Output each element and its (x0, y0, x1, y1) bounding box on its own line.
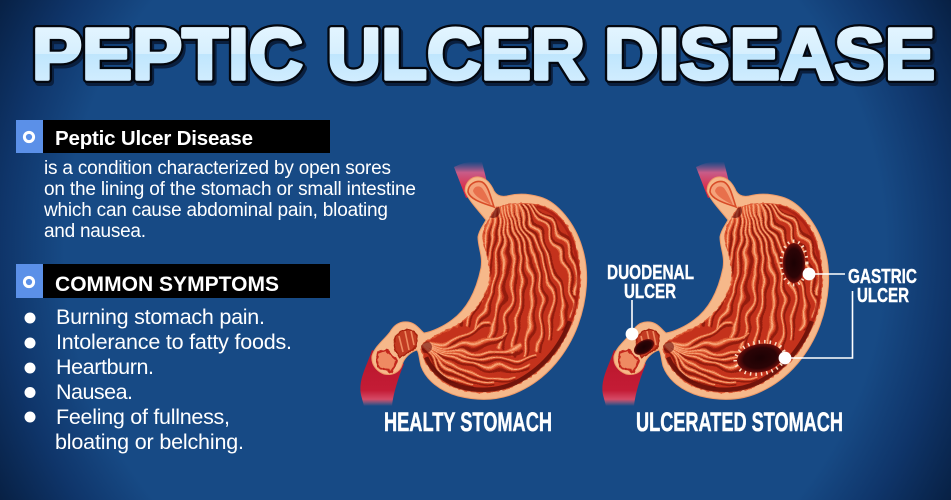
title: DISEASE (606, 18, 937, 98)
title: PEPTIC (34, 18, 305, 98)
callout: duodenal ulcer: DUODENAL (607, 262, 694, 284)
callout: duodenal ulcer (607, 262, 694, 340)
label: healthy stomach: HEALTY STOMACH (384, 407, 552, 437)
definition text: is a condition characterized by open sores (44, 158, 391, 179)
symptom list: Feeling of fullness, (56, 405, 230, 429)
symptom list: Heartburn. (56, 355, 154, 379)
symptom list: Nausea. (56, 380, 133, 404)
callout: gastric ulcer: GASTRIC (848, 266, 917, 288)
symptom list: Burning stomach pain. (56, 305, 265, 329)
symptom list (24, 305, 292, 454)
title (32, 15, 937, 98)
callout: duodenal ulcer: ULCER (624, 281, 676, 303)
heading: Peptic Ulcer Disease: Peptic Ulcer Disease (55, 127, 253, 150)
icon: upper gastric ulcer (781, 241, 807, 285)
icon: duodenal ulcer (631, 336, 657, 358)
illustration: healthy stomach (360, 162, 587, 406)
symptom list: Intolerance to fatty foods. (56, 330, 292, 354)
title: DISEASE (604, 15, 935, 95)
definition text: and nausea. (44, 221, 146, 242)
heading: Peptic Ulcer Disease (16, 120, 330, 153)
heading: common symptoms (16, 264, 330, 298)
title: ULCER (327, 15, 585, 95)
title: ULCER (329, 18, 587, 98)
icon: lower gastric ulcer (733, 338, 787, 378)
illustration: ulcerated stomach (602, 162, 829, 406)
callout: gastric ulcer: ULCER (857, 285, 909, 307)
label: ulcerated stomach: ULCERATED STOMACH (636, 407, 843, 437)
title: PEPTIC (32, 15, 303, 95)
title: DISEASE (604, 15, 935, 95)
heading: common symptoms: COMMON SYMPTOMS (55, 273, 279, 296)
definition text: on the lining of the stomach or small intestine (44, 179, 416, 200)
definition text: which can cause abdominal pain, bloating (43, 200, 388, 221)
title: PEPTIC (32, 15, 303, 95)
panel: definition (16, 120, 416, 242)
panel: common symptoms (16, 264, 330, 454)
definition text (43, 158, 416, 242)
callout: gastric ulcer (779, 266, 917, 364)
title: ULCER (327, 15, 585, 95)
symptom list: bloating or belching. (55, 430, 244, 454)
